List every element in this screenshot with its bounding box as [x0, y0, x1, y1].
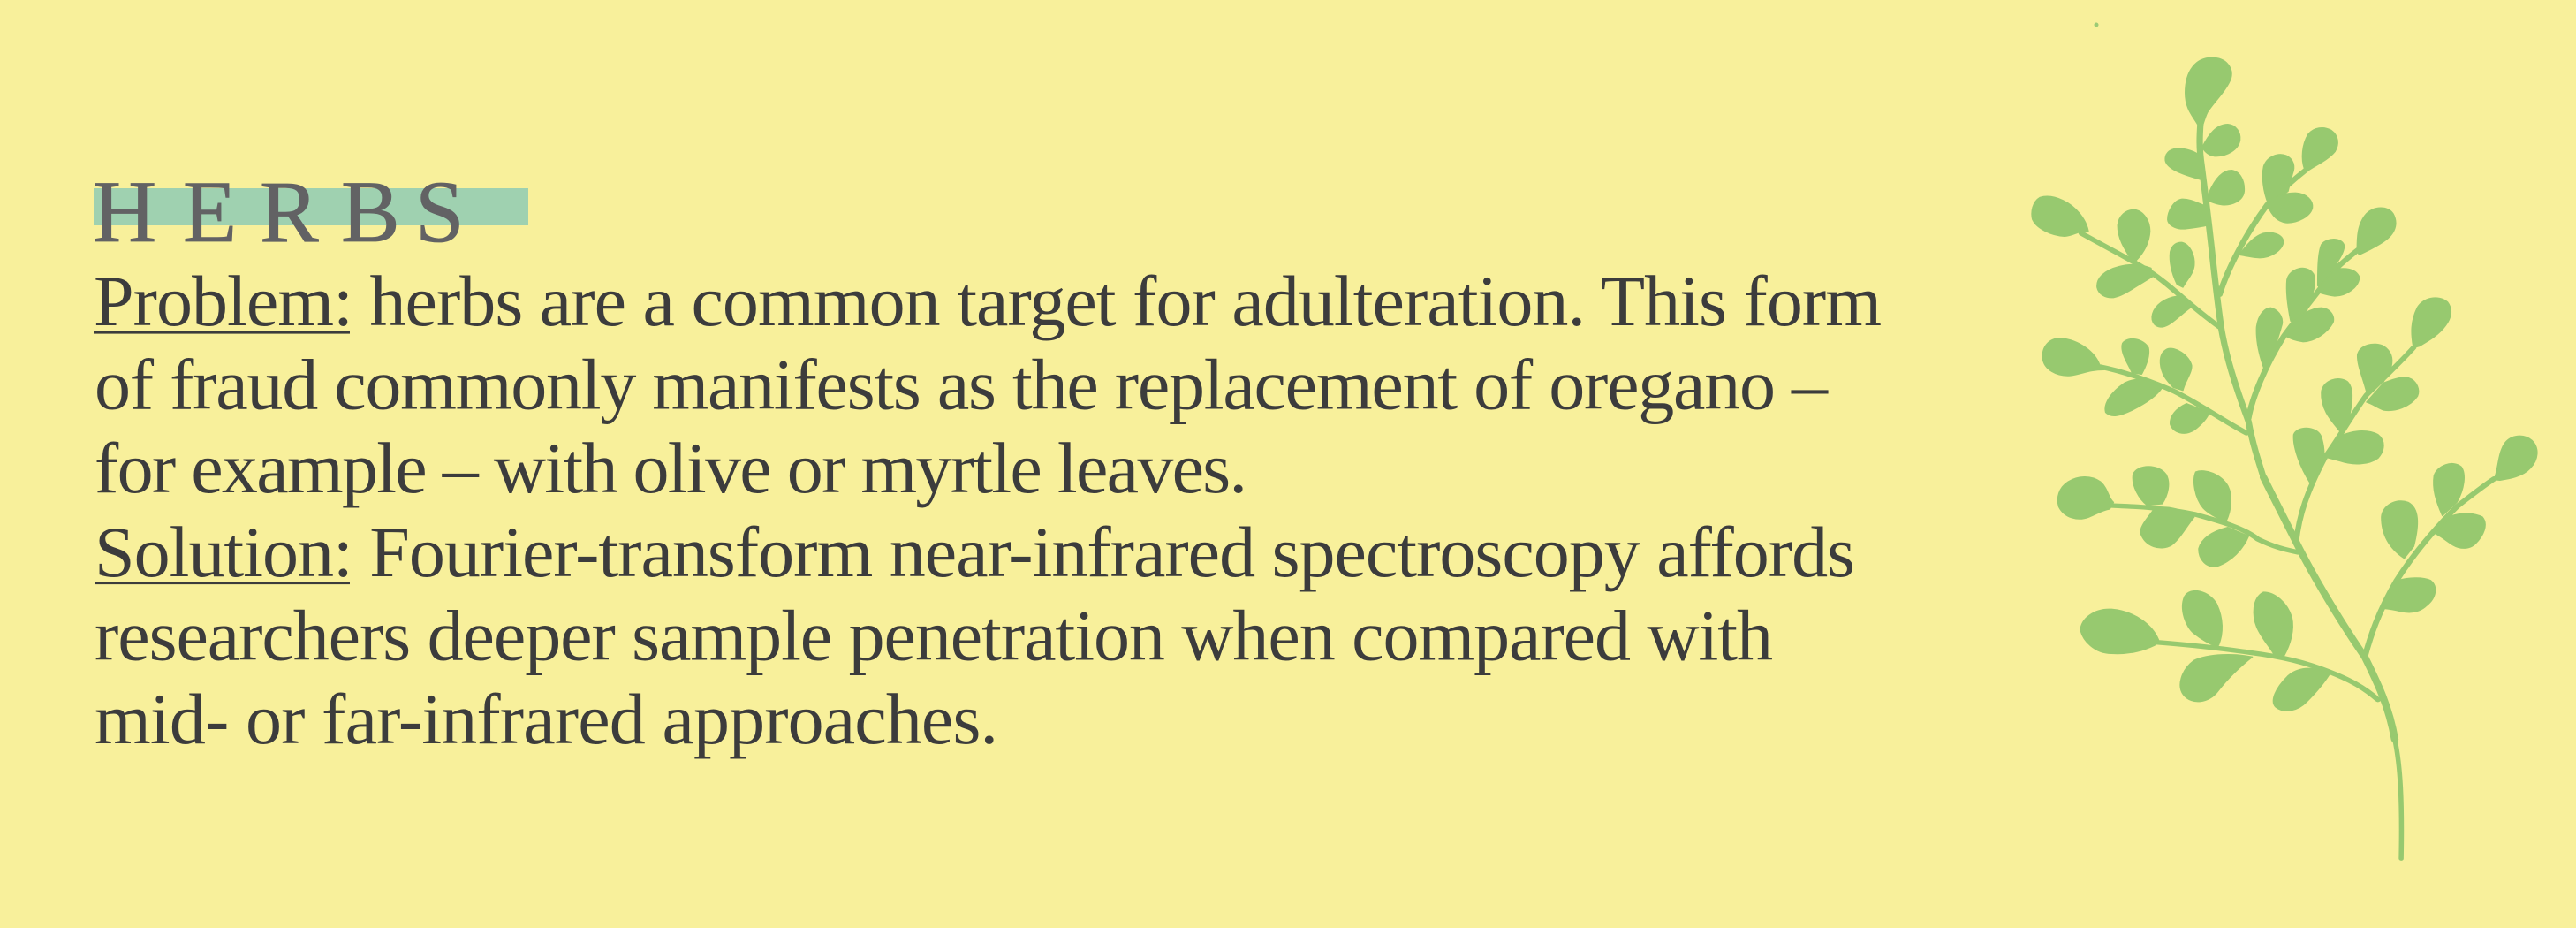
bottom branch leaves: [2080, 591, 2330, 711]
small green speck: [2094, 23, 2099, 27]
middle right branch leaves: [2256, 208, 2396, 369]
heading highlight bar: [94, 188, 528, 225]
upper central leaves: [2165, 57, 2244, 229]
text block: problem and solution: [94, 261, 1882, 759]
solution paragraph: mid- or far-infrared approaches.: [95, 679, 998, 759]
upper left branch leaves: [2032, 196, 2194, 327]
problem paragraph: [94, 261, 1882, 508]
middle left branch leaves: [2042, 338, 2209, 433]
heading text: HERBS: [93, 163, 465, 261]
solution paragraph: Solution: Fourier-transform near-infrared spectroscopy affords: [95, 512, 1855, 592]
lower right branch leaves: [2382, 436, 2537, 612]
upper right branch leaves: [2239, 128, 2337, 258]
lower left branch leaves: [2058, 467, 2248, 567]
heading: HERBS with highlight bar: [93, 163, 528, 261]
problem paragraph: Problem: herbs are a common target for adulteration. This form: [94, 261, 1882, 341]
icon: herb sprig: [2032, 57, 2537, 859]
far right upper branch leaves: [2293, 298, 2451, 483]
solution paragraph: researchers deeper sample penetration when compared with: [95, 595, 1773, 675]
solution paragraph: [95, 512, 1855, 759]
stems: [2081, 124, 2494, 859]
problem paragraph: of fraud commonly manifests as the replacement of oregano –: [95, 345, 1829, 425]
problem paragraph: for example – with olive or myrtle leaves.: [95, 428, 1247, 508]
